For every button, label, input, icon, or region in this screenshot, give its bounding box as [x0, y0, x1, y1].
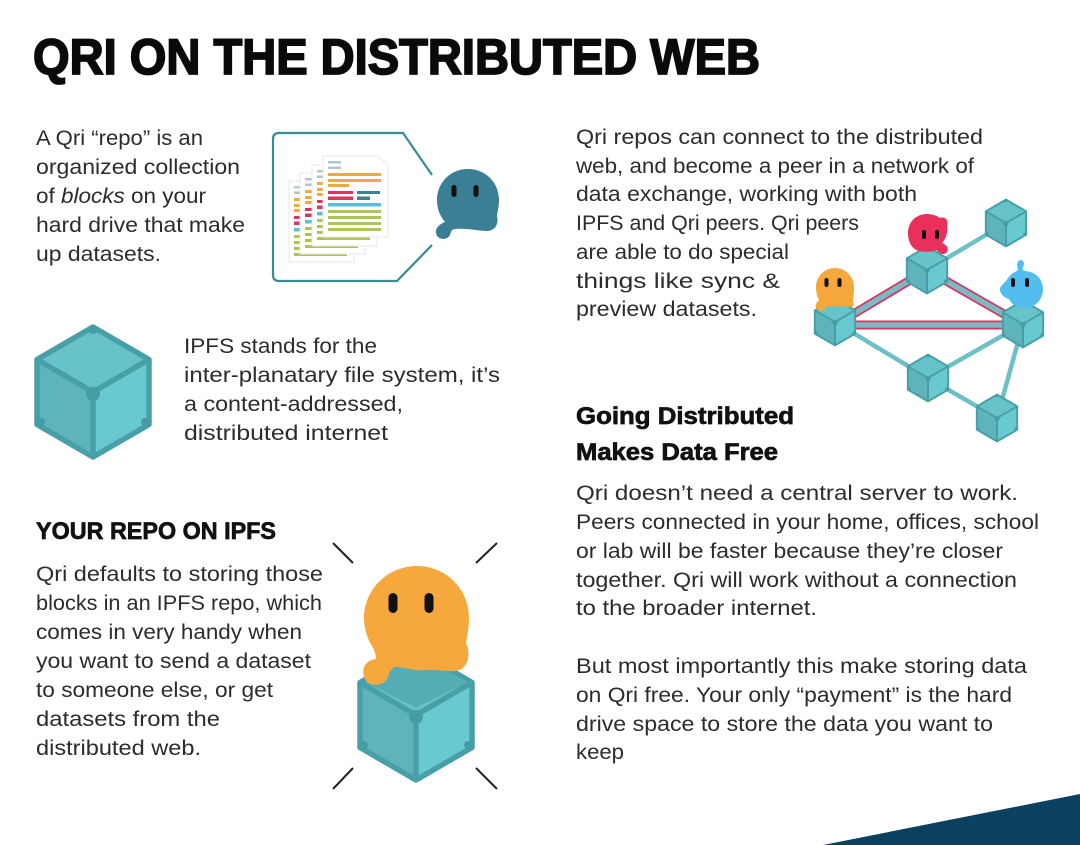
illustration: repo speech bubble with documents and blob	[273, 133, 499, 281]
text block: no central server: Qri doesn’t need a central server to work.	[576, 482, 1018, 505]
text block: IPFS definition: IPFS stands for the	[184, 335, 377, 358]
text block: connecting to the distributed web: data exchange, working with both	[576, 183, 917, 206]
heading: going distributed makes data free: Going Distributed	[576, 403, 794, 430]
text block: what a repo is: hard drive that make	[36, 214, 245, 237]
text block: your repo on IPFS: Qri defaults to storing those	[36, 563, 323, 586]
icon: teal blob character	[436, 169, 499, 239]
text block: connecting to the distributed web: things like sync &	[576, 270, 780, 293]
network diagram	[814, 199, 1044, 442]
text block: your repo on IPFS: distributed web.	[36, 737, 201, 760]
icon: cube	[358, 648, 474, 782]
text block: IPFS definition	[184, 335, 500, 445]
text block: no central server: to the broader internet.	[576, 597, 817, 620]
text block: storing data is free: But most importantly this make storing data	[576, 655, 1027, 678]
text block: your repo on IPFS: you want to send a dataset	[36, 650, 311, 673]
speech bubble outline	[273, 133, 432, 281]
text block: your repo on IPFS: blocks in an IPFS repo, which	[36, 592, 322, 615]
heading: going distributed makes data free: Makes Data Free	[576, 439, 778, 466]
text block: storing data is free: keep	[576, 741, 624, 764]
text block: storing data is free: drive space to store the data you want to	[576, 713, 993, 736]
text block: your repo on IPFS: comes in very handy when	[36, 621, 302, 644]
text block: what a repo is: up datasets.	[36, 243, 161, 266]
icon: IPFS cube	[35, 325, 151, 459]
icon: blue blob peer	[1000, 260, 1043, 308]
text block: storing data is free: on Qri free. Your only “payment” is the hard	[576, 684, 1012, 707]
title: QRI ON THE DISTRIBUTED WEB	[33, 29, 760, 85]
text block: storing data is free	[576, 655, 1027, 764]
icon: orange blob peer	[816, 268, 854, 311]
text block: no central server: together. Qri will work without a connection	[576, 569, 1017, 592]
text block: what a repo is: A Qri “repo” is an	[36, 127, 203, 150]
network nodes	[814, 199, 1044, 442]
text block: IPFS definition: a content-addressed,	[184, 393, 403, 416]
heading: going distributed makes data free	[576, 403, 794, 466]
icon: stack of data documents	[289, 156, 388, 262]
heading: your repo on IPFS: YOUR REPO ON IPFS	[36, 518, 276, 545]
text block: what a repo is: organized collection	[36, 156, 240, 179]
text block: connecting to the distributed web: are able to do special	[576, 241, 789, 264]
footer corner shape	[823, 794, 1080, 845]
text block: IPFS definition: distributed internet	[184, 422, 388, 445]
illustration: orange blob on cube with rays	[333, 543, 497, 789]
text block: connecting to the distributed web: preview datasets.	[576, 298, 757, 321]
text block: connecting to the distributed web: Qri repos can connect to the distributed	[576, 126, 983, 149]
text block: connecting to the distributed web	[575, 126, 983, 321]
icon: red blob peer	[908, 214, 948, 254]
text block: connecting to the distributed web: IPFS and Qri peers. Qri peers	[576, 212, 859, 235]
text block: your repo on IPFS: to someone else, or get	[36, 679, 273, 702]
peer connections	[835, 223, 1023, 418]
text block: what a repo is: of blocks on your	[36, 185, 206, 208]
Qri peer connections	[835, 270, 1023, 325]
text block: no central server: Peers connected in your home, offices, school	[576, 511, 1039, 534]
text block: connecting to the distributed web: web, and become a peer in a network of	[575, 155, 974, 178]
icon: orange blob character	[363, 566, 469, 685]
text block: your repo on IPFS	[36, 563, 323, 760]
rays	[333, 543, 497, 789]
text block: IPFS definition: inter-planatary file system, it’s	[184, 364, 500, 387]
text block: what a repo is	[36, 127, 245, 266]
text block: no central server	[576, 482, 1039, 620]
text block: no central server: or lab will be faster because they’re closer	[576, 540, 1003, 563]
text block: your repo on IPFS: datasets from the	[36, 708, 220, 731]
